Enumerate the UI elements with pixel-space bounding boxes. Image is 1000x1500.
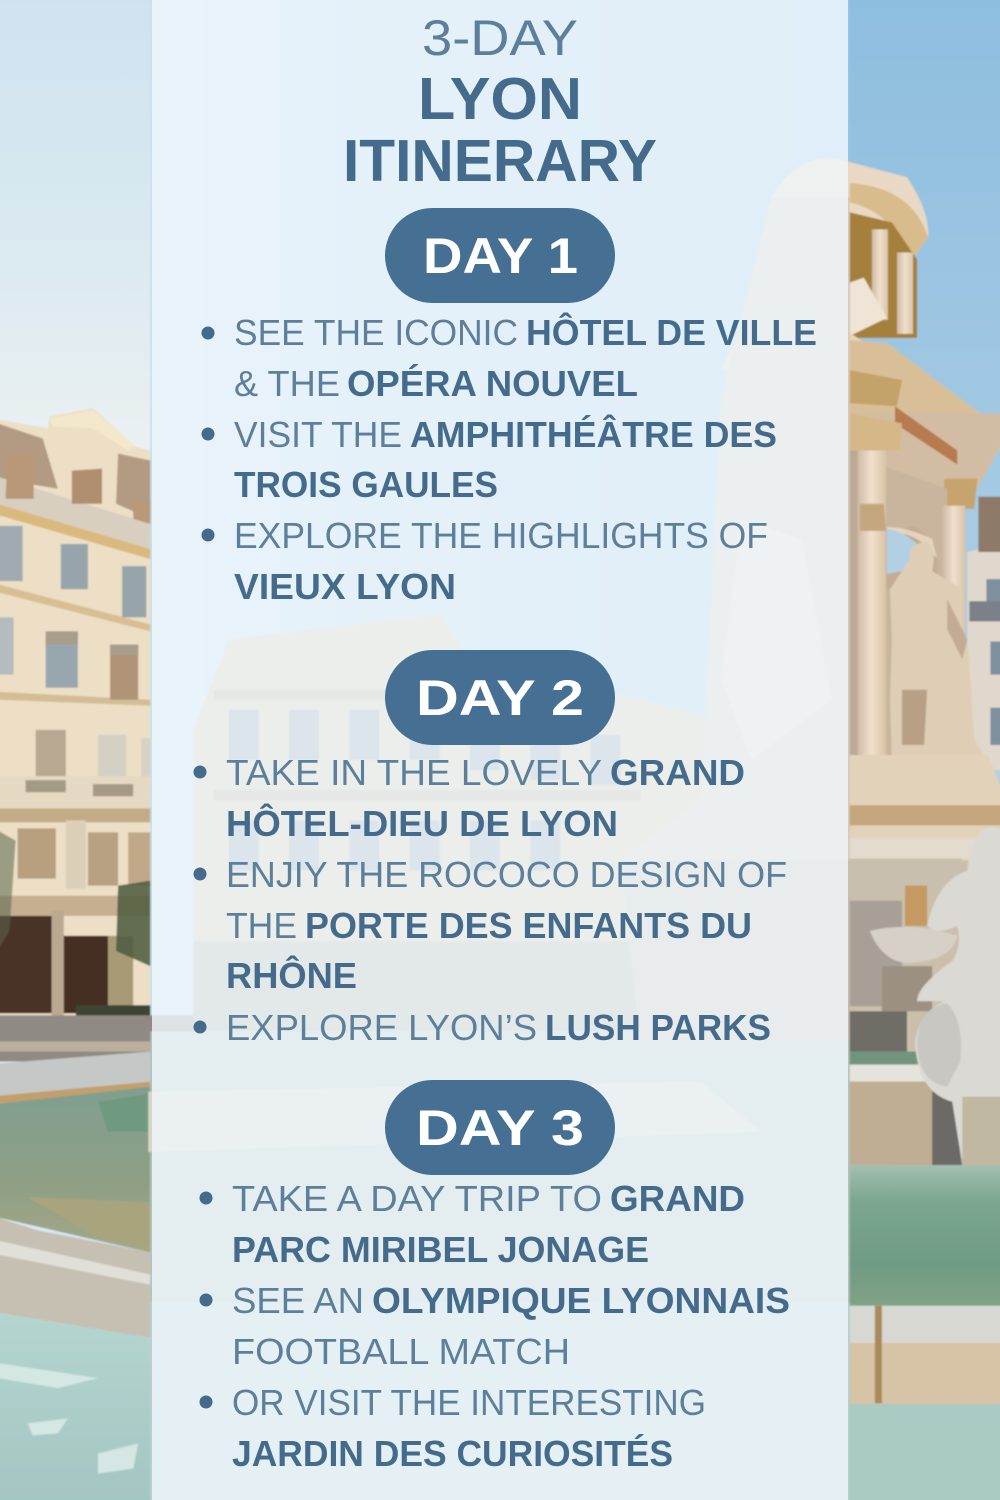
ghost fountain in centre [621, 197, 850, 1041]
title [343, 10, 657, 194]
day 2 list: EXPLORE LYON’S [226, 1007, 537, 1048]
day 1 list: OPÉRA NOUVEL [347, 363, 638, 404]
day 3 list: OR VISIT THE INTERESTING [232, 1382, 706, 1423]
centre basin [150, 1031, 850, 1303]
day 1 list: VIEUX LYON [234, 566, 456, 607]
day 3 list [200, 1178, 790, 1474]
left lower water [0, 1313, 150, 1500]
fountain tower [721, 159, 1000, 760]
day 2 list: HÔTEL-DIEU DE LYON [226, 802, 618, 844]
mermaid statue [915, 826, 1000, 1165]
day 3 badge [385, 1080, 615, 1175]
day 2 list: ENJIY THE ROCOCO DESIGN OF [226, 854, 787, 895]
day 3 list: SEE AN [232, 1280, 364, 1321]
day 1 badge [385, 208, 615, 303]
day 2 list [194, 752, 787, 1048]
left basin water [0, 1087, 150, 1252]
day 2 list: THE [226, 905, 297, 946]
right building [967, 497, 1000, 770]
day 3 list: TAKE A DAY TRIP TO [232, 1178, 602, 1219]
translucent centre panel [152, 0, 848, 1500]
day 3 list: PARC MIRIBEL JONAGE [232, 1229, 649, 1270]
day 3 list: OLYMPIQUE LYONNAIS [372, 1280, 790, 1321]
day 1 list: VISIT THE [234, 414, 402, 455]
day 2 list: LUSH PARKS [545, 1007, 771, 1048]
day 2 list: GRAND [610, 752, 745, 793]
right basin rim [850, 1306, 1000, 1404]
right lower water [850, 1404, 1000, 1500]
day 1 list: & THE [234, 363, 340, 404]
day 3 list: JARDIN DES CURIOSITÉS [232, 1433, 673, 1474]
day 2 list: TAKE IN THE LOVELY [226, 752, 602, 793]
street and far rim [0, 1015, 1000, 1104]
day 3 list: GRAND [610, 1178, 745, 1219]
statue [890, 542, 987, 762]
title: 3-DAY [422, 10, 578, 66]
day 1 list: AMPHITHÉÂTRE DES [410, 413, 777, 455]
day 1 list: TROIS GAULES [234, 464, 498, 505]
day 3 badge: DAY 3 [416, 1100, 584, 1156]
day 1 list: SEE THE ICONIC [234, 312, 518, 353]
ghost building in centre [193, 614, 721, 1041]
day 1 list: EXPLORE THE HIGHLIGHTS OF [234, 515, 768, 556]
title: ITINERARY [343, 128, 657, 194]
title: LYON [418, 66, 582, 132]
day 3 list: FOOTBALL MATCH [232, 1331, 570, 1372]
day 1 badge: DAY 1 [423, 228, 578, 284]
right basin water [850, 1165, 1000, 1306]
day 1 list: HÔTEL DE VILLE [526, 311, 817, 353]
day 2 badge [385, 650, 615, 745]
left building [0, 408, 150, 1041]
fountain base [850, 755, 1000, 1165]
left basin rim [0, 1217, 150, 1338]
day 1 list [202, 311, 817, 607]
day 2 list: RHÔNE [226, 954, 357, 996]
day 2 list: PORTE DES ENFANTS DU [305, 905, 752, 946]
day 2 badge: DAY 2 [416, 670, 584, 726]
